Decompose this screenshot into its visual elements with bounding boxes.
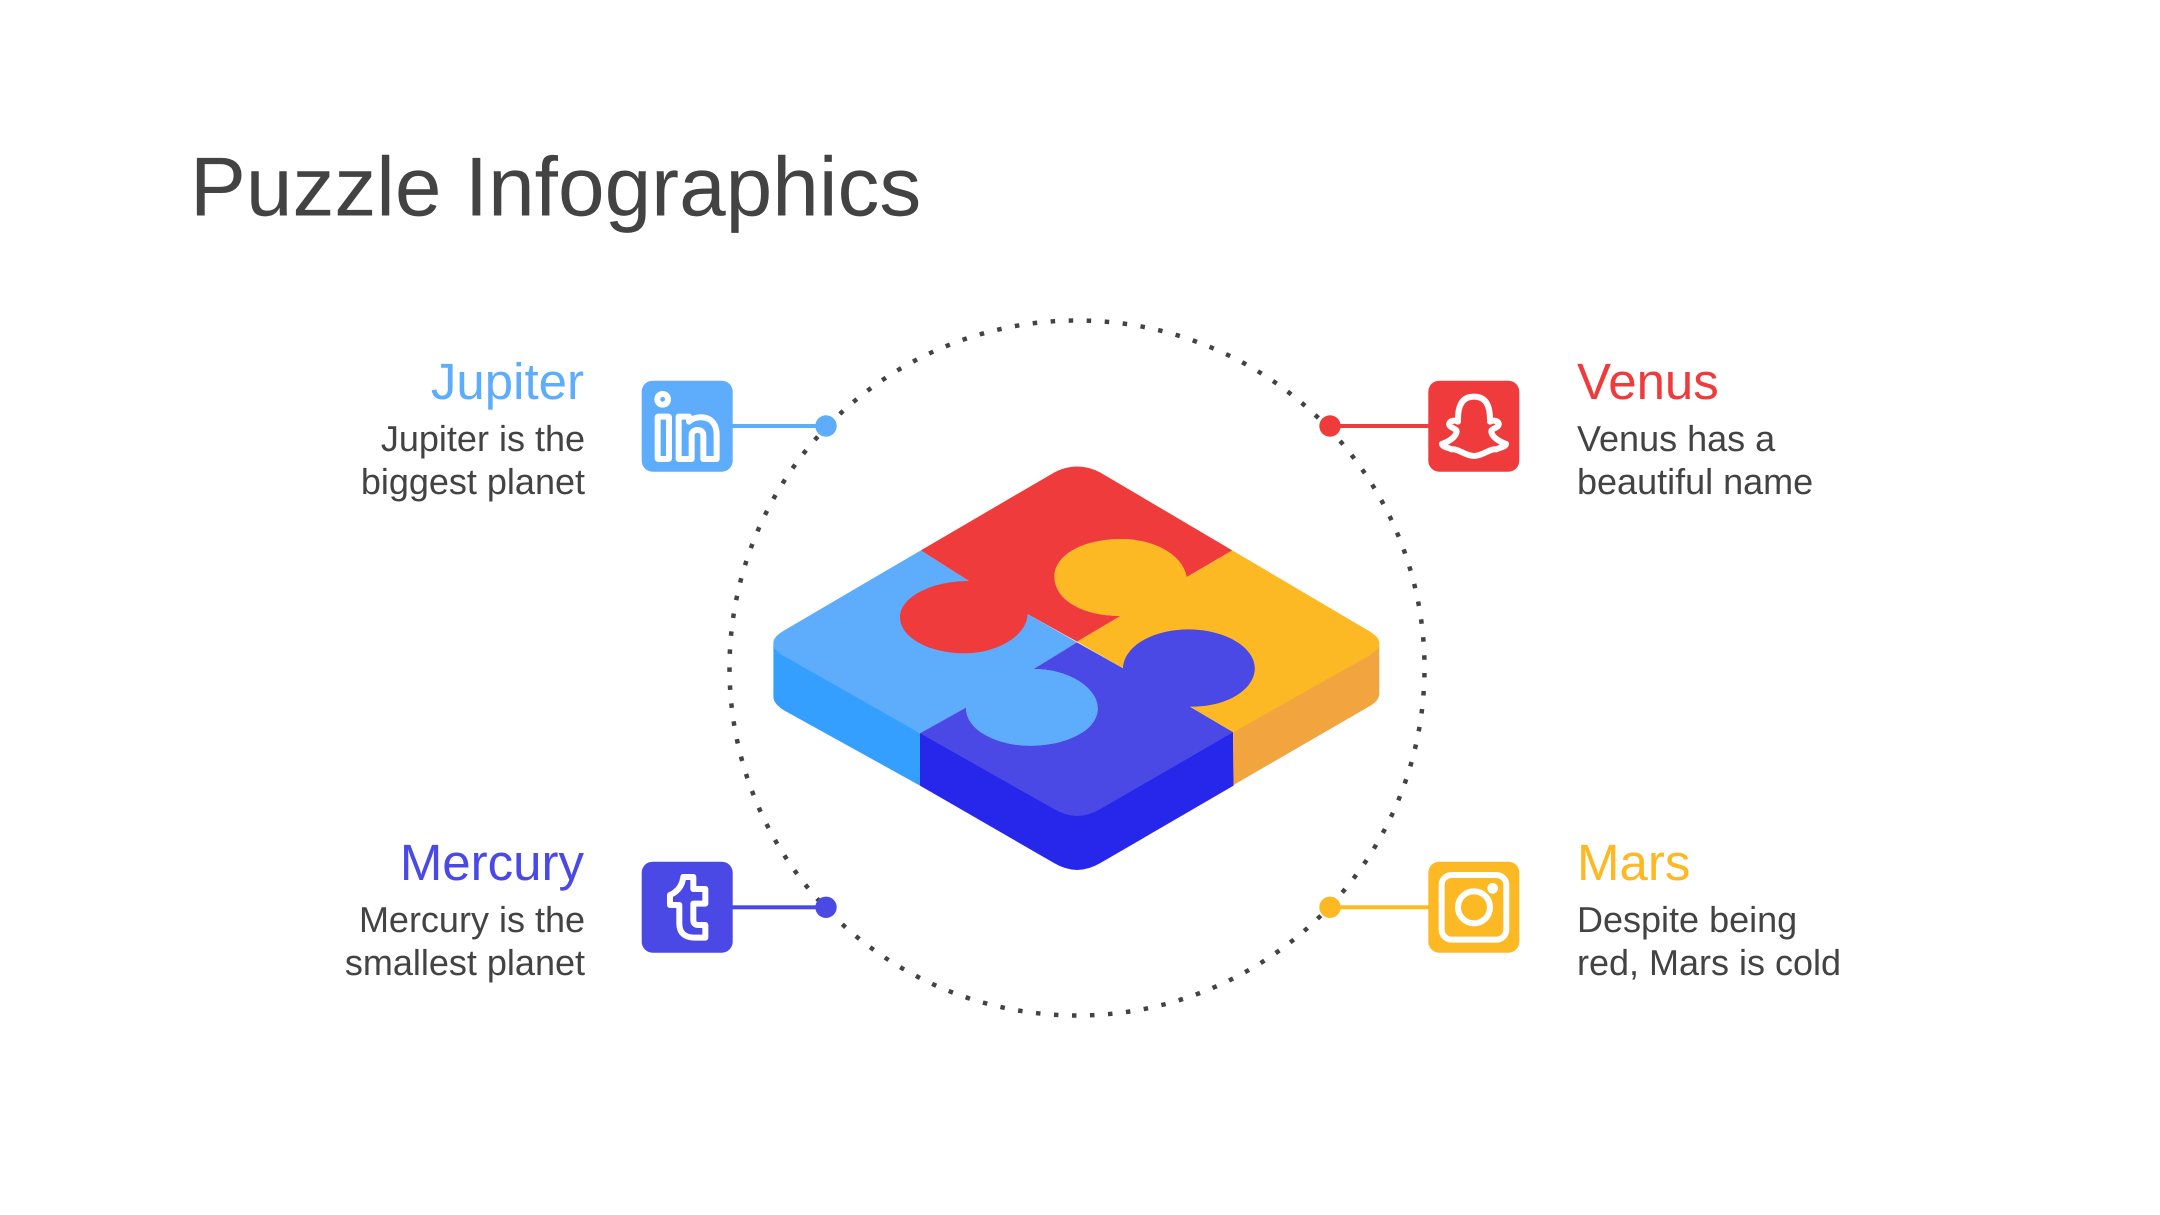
Mercury connector xyxy=(732,897,837,918)
side: left xyxy=(773,643,920,786)
piece: red xyxy=(900,466,1232,653)
icon: LinkedIn xyxy=(642,381,733,472)
item: Venus xyxy=(1319,353,1813,502)
Jupiter description: biggest planet xyxy=(361,461,585,502)
icon: Instagram xyxy=(1428,862,1519,953)
Jupiter description: Jupiter is the xyxy=(381,418,585,459)
Venus description: beautiful name xyxy=(1577,461,1813,502)
icon: Snapchat xyxy=(1428,381,1519,472)
Mars description: red, Mars is cold xyxy=(1577,942,1841,983)
Venus connector xyxy=(1319,415,1429,437)
Venus heading: Venus xyxy=(1577,353,1719,410)
item: Mars xyxy=(1319,834,1841,983)
Mercury description: Mercury is the xyxy=(359,899,585,940)
Venus description: Venus has a xyxy=(1577,418,1776,459)
icon: Tumblr xyxy=(642,862,733,953)
Mars description: Despite being xyxy=(1577,899,1797,940)
item: Jupiter xyxy=(361,353,837,502)
Mercury heading: Mercury xyxy=(400,834,584,891)
side: right orange xyxy=(1233,643,1379,785)
Jupiter heading: Jupiter xyxy=(431,353,584,410)
item: Mercury xyxy=(345,834,837,983)
title: Puzzle Infographics xyxy=(190,140,921,234)
side: front dark blue xyxy=(920,732,1234,870)
Mercury description: smallest planet xyxy=(345,942,585,983)
Mars connector xyxy=(1319,897,1429,918)
dotted circle xyxy=(730,320,1424,1016)
Mars heading: Mars xyxy=(1577,834,1690,891)
puzzle illustration xyxy=(773,466,1379,870)
piece: yellow xyxy=(1054,539,1379,732)
piece: light blue xyxy=(773,550,1098,746)
Jupiter connector xyxy=(732,415,837,437)
piece: indigo xyxy=(920,629,1255,816)
